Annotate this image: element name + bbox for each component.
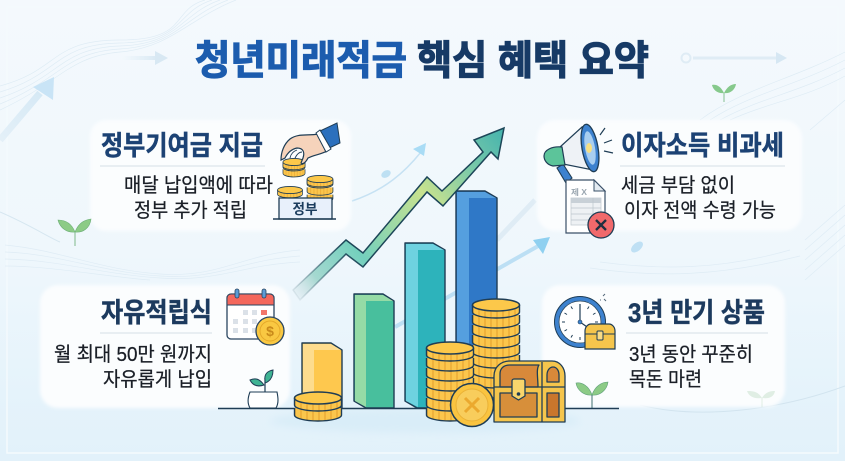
decorative blue arrow behind bars	[395, 237, 550, 327]
heading: 정부기여금 지급: 정부기여금 지급	[101, 131, 263, 161]
heading: 자유적립식: 자유적립식	[101, 298, 212, 328]
treasure chest	[494, 361, 565, 422]
coin stack: medium	[426, 342, 474, 421]
text: 이자 전액 수령 가능: 이자 전액 수령 가능	[624, 199, 776, 222]
bar: green	[354, 294, 394, 408]
icon: megaphone	[544, 123, 613, 183]
text: 월 최대 50만 원까지: 월 최대 50만 원까지	[54, 343, 212, 366]
icon: tax document with red X	[566, 180, 614, 238]
icon: tax document with red X: 제 X	[571, 187, 588, 197]
coin stack: small	[294, 392, 342, 421]
sprout: top right	[712, 84, 736, 102]
card: 정부기여금 지급	[90, 120, 351, 231]
decorative arrow: top right with circle	[682, 52, 787, 64]
floor shadow	[270, 409, 580, 433]
icon: clock with small chest	[554, 294, 615, 349]
decorative leaf	[629, 239, 645, 255]
icon: hand placing coins on government box	[273, 123, 340, 219]
sprout: left	[58, 219, 91, 246]
decorative arrow: top left fading	[122, 51, 168, 65]
card: 3년 만기 상품	[542, 285, 785, 407]
card: 자유적립식	[40, 285, 290, 408]
ground line	[218, 408, 619, 410]
text: 매달 납입액에 따라: 매달 납입액에 따라	[124, 174, 273, 197]
decorative curved arrow	[352, 143, 426, 201]
decorative arrow: upper left	[0, 77, 54, 140]
bar: teal	[405, 243, 445, 408]
title: 핵심 혜택 요약	[417, 39, 649, 83]
heading: 이자소득 비과세: 이자소득 비과세	[621, 131, 784, 161]
card: 이자소득 비과세	[537, 120, 802, 238]
sprout: bottom right	[576, 382, 608, 408]
coin stack: tall	[472, 299, 520, 408]
arrow: growth trend	[293, 128, 504, 300]
heading: 3년 만기 상품: 3년 만기 상품	[628, 298, 765, 328]
text: 정부 추가 적립: 정부 추가 적립	[134, 199, 247, 222]
plant in pot	[248, 370, 278, 408]
icon: hand placing coins on government box: 정부	[292, 201, 318, 217]
text: 3년 동안 꾸준히: 3년 동안 꾸준히	[629, 343, 753, 366]
title	[195, 39, 649, 83]
bar: yellow	[302, 343, 342, 408]
icon: calendar with coin	[227, 289, 284, 345]
bar: blue	[456, 191, 497, 380]
icon: calendar with coin: $	[266, 323, 274, 339]
text: 목돈 마련: 목돈 마련	[629, 368, 702, 391]
text: 자유롭게 납입: 자유롭게 납입	[103, 368, 212, 391]
coin: large front	[450, 384, 494, 426]
decorative faint arrow	[497, 200, 535, 240]
icon: faint sprout	[747, 391, 775, 407]
bar chart with growth arrow and coins	[218, 128, 619, 426]
text: 세금 부담 없이: 세금 부담 없이	[621, 174, 735, 197]
title: 청년미래적금	[195, 39, 407, 83]
